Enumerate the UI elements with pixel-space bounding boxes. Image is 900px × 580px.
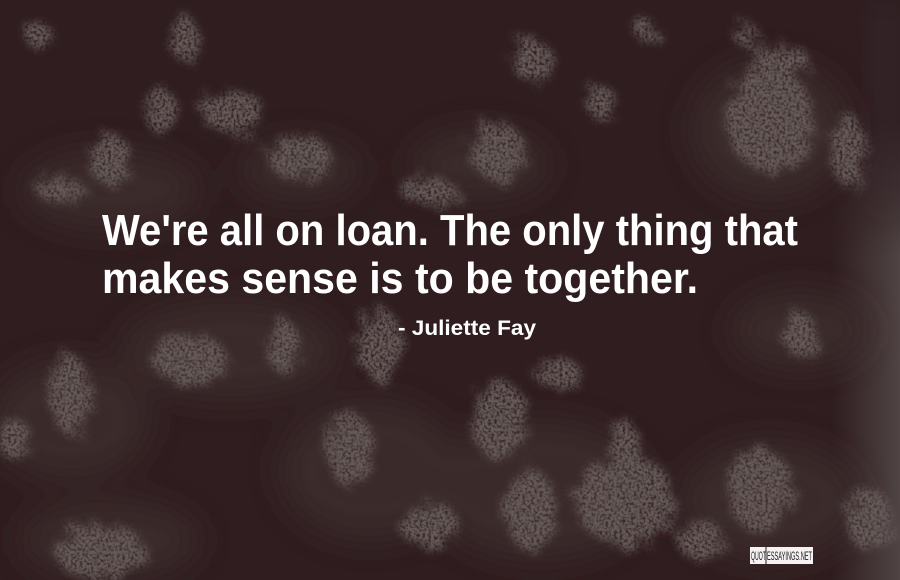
quote line 2: makes sense is to be together. (102, 254, 698, 303)
author attribution: - Juliette Fay (398, 317, 536, 340)
watermark badge: QUOT (751, 549, 766, 563)
quote line 1: We're all on loan. The only thing that (102, 206, 798, 255)
quote text (102, 206, 798, 303)
watermark badge (750, 547, 813, 564)
text: ESSAYINGS.NET (767, 549, 812, 563)
